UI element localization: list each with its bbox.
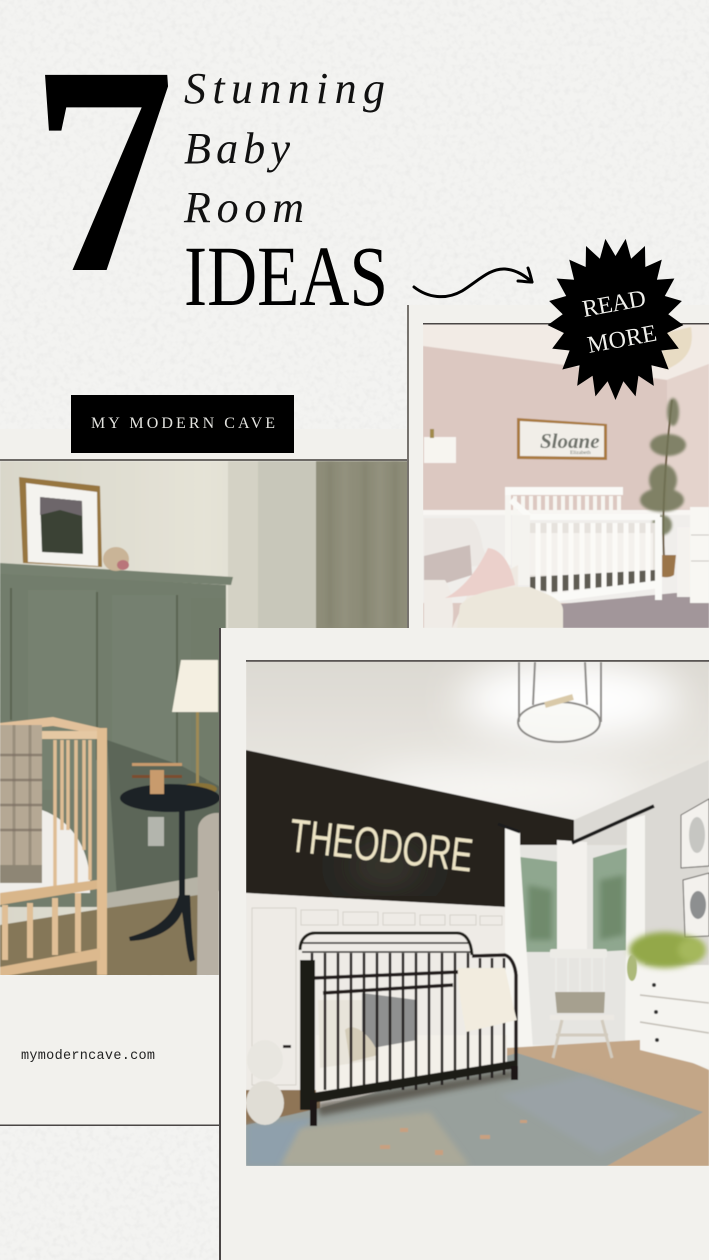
wooden crib [0,717,107,977]
badge: read more starburst: READ [580,286,648,323]
pink blanket [445,548,515,598]
floor lamp [424,429,456,463]
title: Stunning Baby Room: Stunning [184,64,385,113]
line: top of main photo [246,660,709,662]
ottoman [457,587,563,628]
armchair [424,544,518,628]
curtain [316,461,408,631]
brand label: MY MODERN CAVE [91,415,275,432]
floor and baseboard [0,877,205,976]
wainscot panelling [246,893,505,1100]
name sign: Elizabeth [570,450,591,456]
outlet [148,817,164,846]
side wall [574,761,709,966]
title: IDEAS: IDEAS [184,228,388,324]
title: large numeral 7: 7 [23,5,193,335]
wall panelling [0,563,233,907]
photo: sage green nursery [0,461,408,981]
side table [120,784,220,962]
name sign [517,418,607,460]
potted plant [627,932,706,981]
arrow: pointing to read more [414,268,532,297]
olive tree [640,398,686,577]
stuffed bunny [103,547,129,571]
rug [561,592,709,628]
title: Stunning Baby Room: Baby [184,124,290,173]
panel: main photo frame [219,628,709,1260]
rug [246,1053,703,1166]
name sign: Sloane [540,429,600,453]
right wall [667,364,709,520]
photo: blush pink nursery [423,324,709,628]
panel: website footer [0,976,220,1126]
dark accent wall [246,750,574,907]
black iron crib [300,933,518,1126]
ceiling pendant [660,327,692,370]
lamp [172,660,218,795]
floor [246,1040,709,1166]
wall name lettering: THEODORE [287,808,476,882]
badge: read more starburst [548,239,683,400]
wall art [681,799,709,937]
brand label [71,395,294,453]
cream throw blanket [458,968,517,1032]
photo: Theodore nursery with dark wall [246,660,709,1166]
curtains and rod [498,806,654,1053]
wainscot [423,510,709,603]
line: top of right photo [423,323,709,324]
title: Stunning Baby Room: Room [183,183,304,232]
dresser [677,507,709,603]
dresser [640,965,709,1067]
framed picture [19,477,102,567]
panel: right photo frame [407,305,709,628]
plush llama [246,1040,291,1125]
toy plane [132,763,182,794]
ceiling [246,662,709,821]
panel: band behind brand label [0,429,408,461]
rocking chair [550,949,614,1058]
panel: website footer: mymoderncave.com [21,1049,155,1064]
white crib [505,487,662,602]
armchair edge [197,813,219,976]
ceiling [423,324,709,380]
ceiling light [518,662,601,742]
badge: read more starburst: MORE [585,321,659,359]
title: Stunning Baby Room [183,64,385,232]
windows [520,844,628,1045]
